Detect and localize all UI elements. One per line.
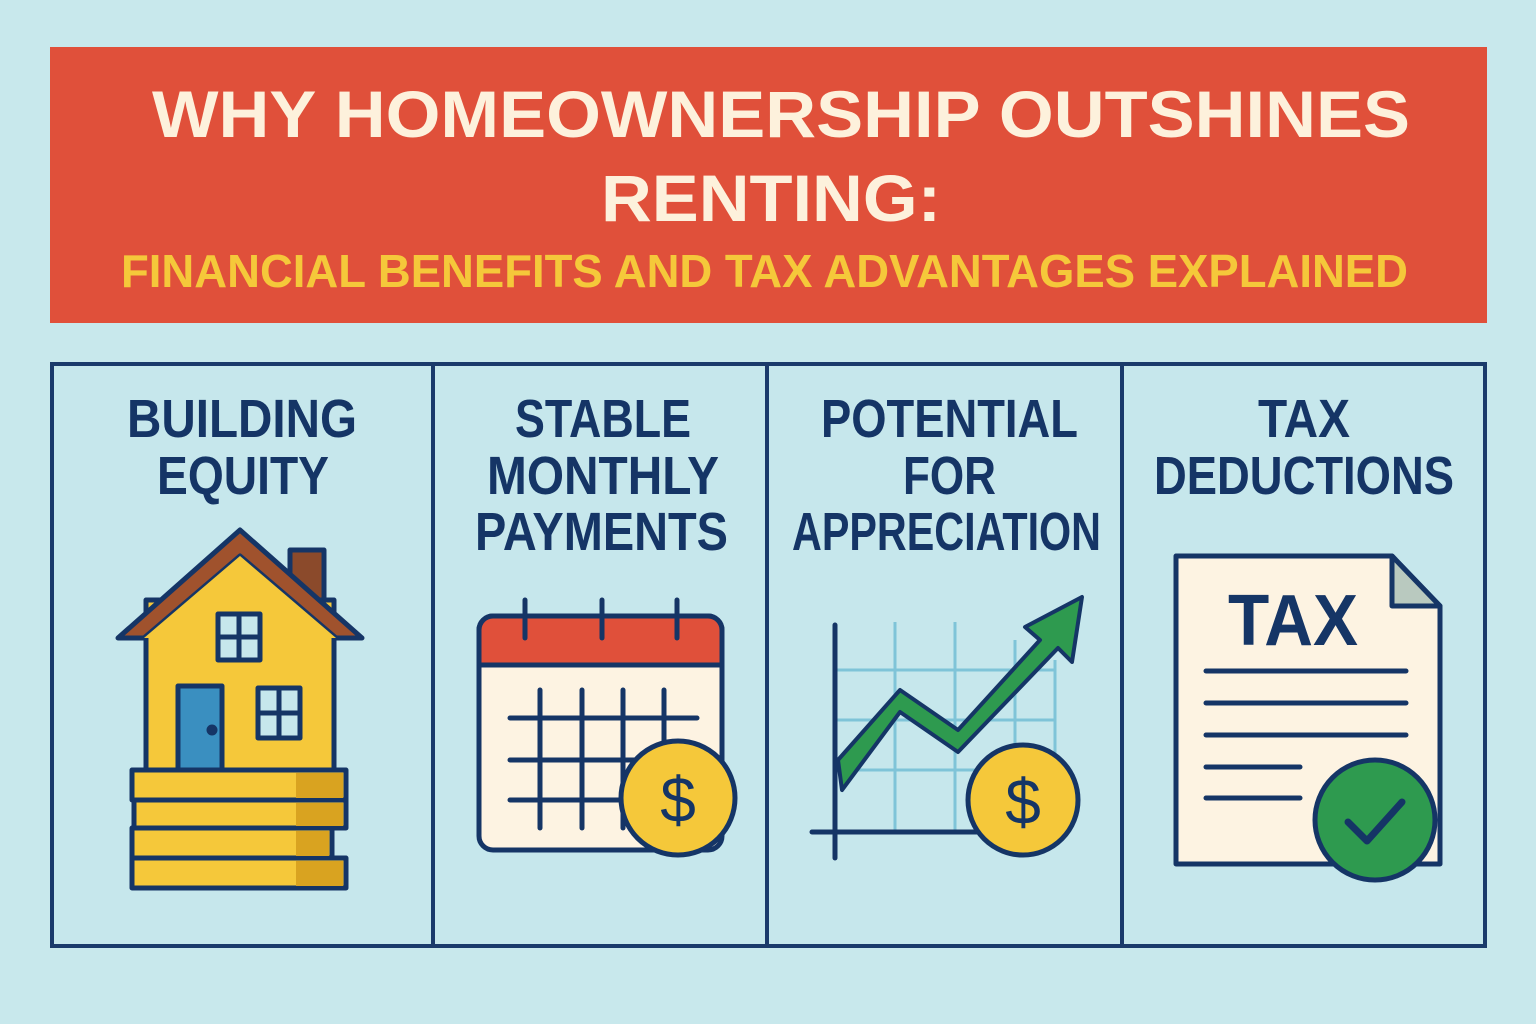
icon: house on coins [118, 530, 362, 888]
heading: potential for appreciation [792, 389, 1101, 562]
heading: tax deductions: DEDUCTIONS [1154, 446, 1454, 506]
panel: stable monthly payments [475, 389, 735, 855]
heading: potential for appreciation: FOR [903, 446, 996, 506]
panel: stable monthly payments: $ [660, 764, 696, 836]
heading: stable monthly payments [475, 389, 728, 562]
panels frame [52, 364, 1485, 946]
title [152, 77, 1410, 235]
title banner [50, 47, 1487, 323]
heading: stable monthly payments: PAYMENTS [475, 502, 728, 562]
heading: stable monthly payments: STABLE [515, 389, 691, 449]
icon: growth chart with coin: $ [1005, 766, 1041, 838]
subtitle: FINANCIAL BENEFITS AND TAX ADVANTAGES EXPLAINED [121, 245, 1408, 297]
heading: building equity: EQUITY [157, 446, 329, 506]
heading: building equity [127, 389, 357, 506]
panel: potential for appreciation [792, 389, 1101, 858]
panel: tax deductions [1154, 389, 1454, 880]
heading: stable monthly payments: MONTHLY [487, 446, 719, 506]
heading: tax deductions [1154, 389, 1454, 506]
heading: potential for appreciation: APPRECIATION [792, 502, 1101, 562]
icon: calendar with coin [479, 600, 735, 855]
heading: potential for appreciation: POTENTIAL [821, 389, 1078, 449]
icon: tax document with check [1176, 556, 1440, 880]
heading: building equity: BUILDING [127, 389, 357, 449]
icon: growth chart with coin [812, 597, 1082, 858]
title: RENTING: [601, 161, 941, 235]
heading: tax deductions: TAX [1258, 389, 1350, 449]
panel: tax deductions: TAX [1228, 581, 1358, 661]
panel: building equity [118, 389, 362, 888]
title: WHY HOMEOWNERSHIP OUTSHINES [152, 77, 1410, 151]
